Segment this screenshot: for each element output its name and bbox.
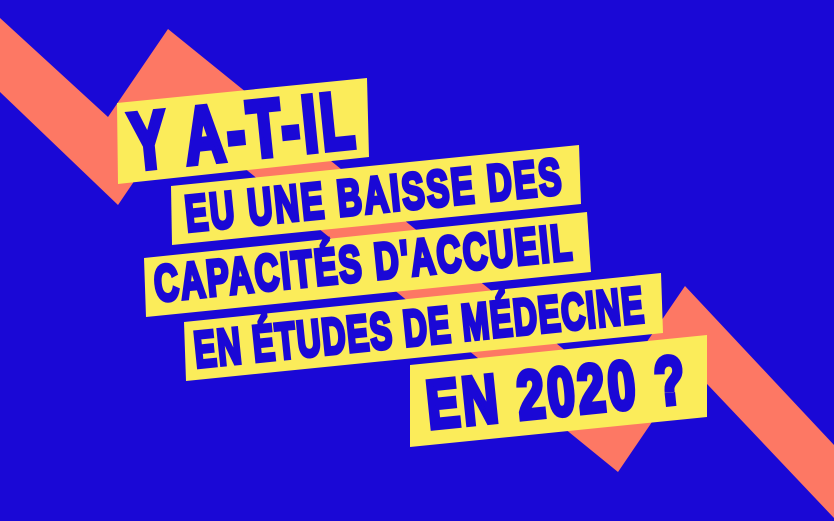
title strip 4: EN ÉTUDES DE MÉDECINE: EN ÉTUDES DE MÉDECINE bbox=[191, 277, 646, 379]
title strip 3: CAPACITÉS D'ACCUEIL: CAPACITÉS D'ACCUEIL bbox=[151, 215, 574, 313]
title strip 2: EU UNE BAISSE DES: EU UNE BAISSE DES bbox=[182, 149, 564, 243]
title strip 5: EN 2020 ?: EN 2020 ? bbox=[423, 341, 688, 443]
title strip 1: Y A-T-IL: Y A-T-IL bbox=[126, 76, 358, 187]
